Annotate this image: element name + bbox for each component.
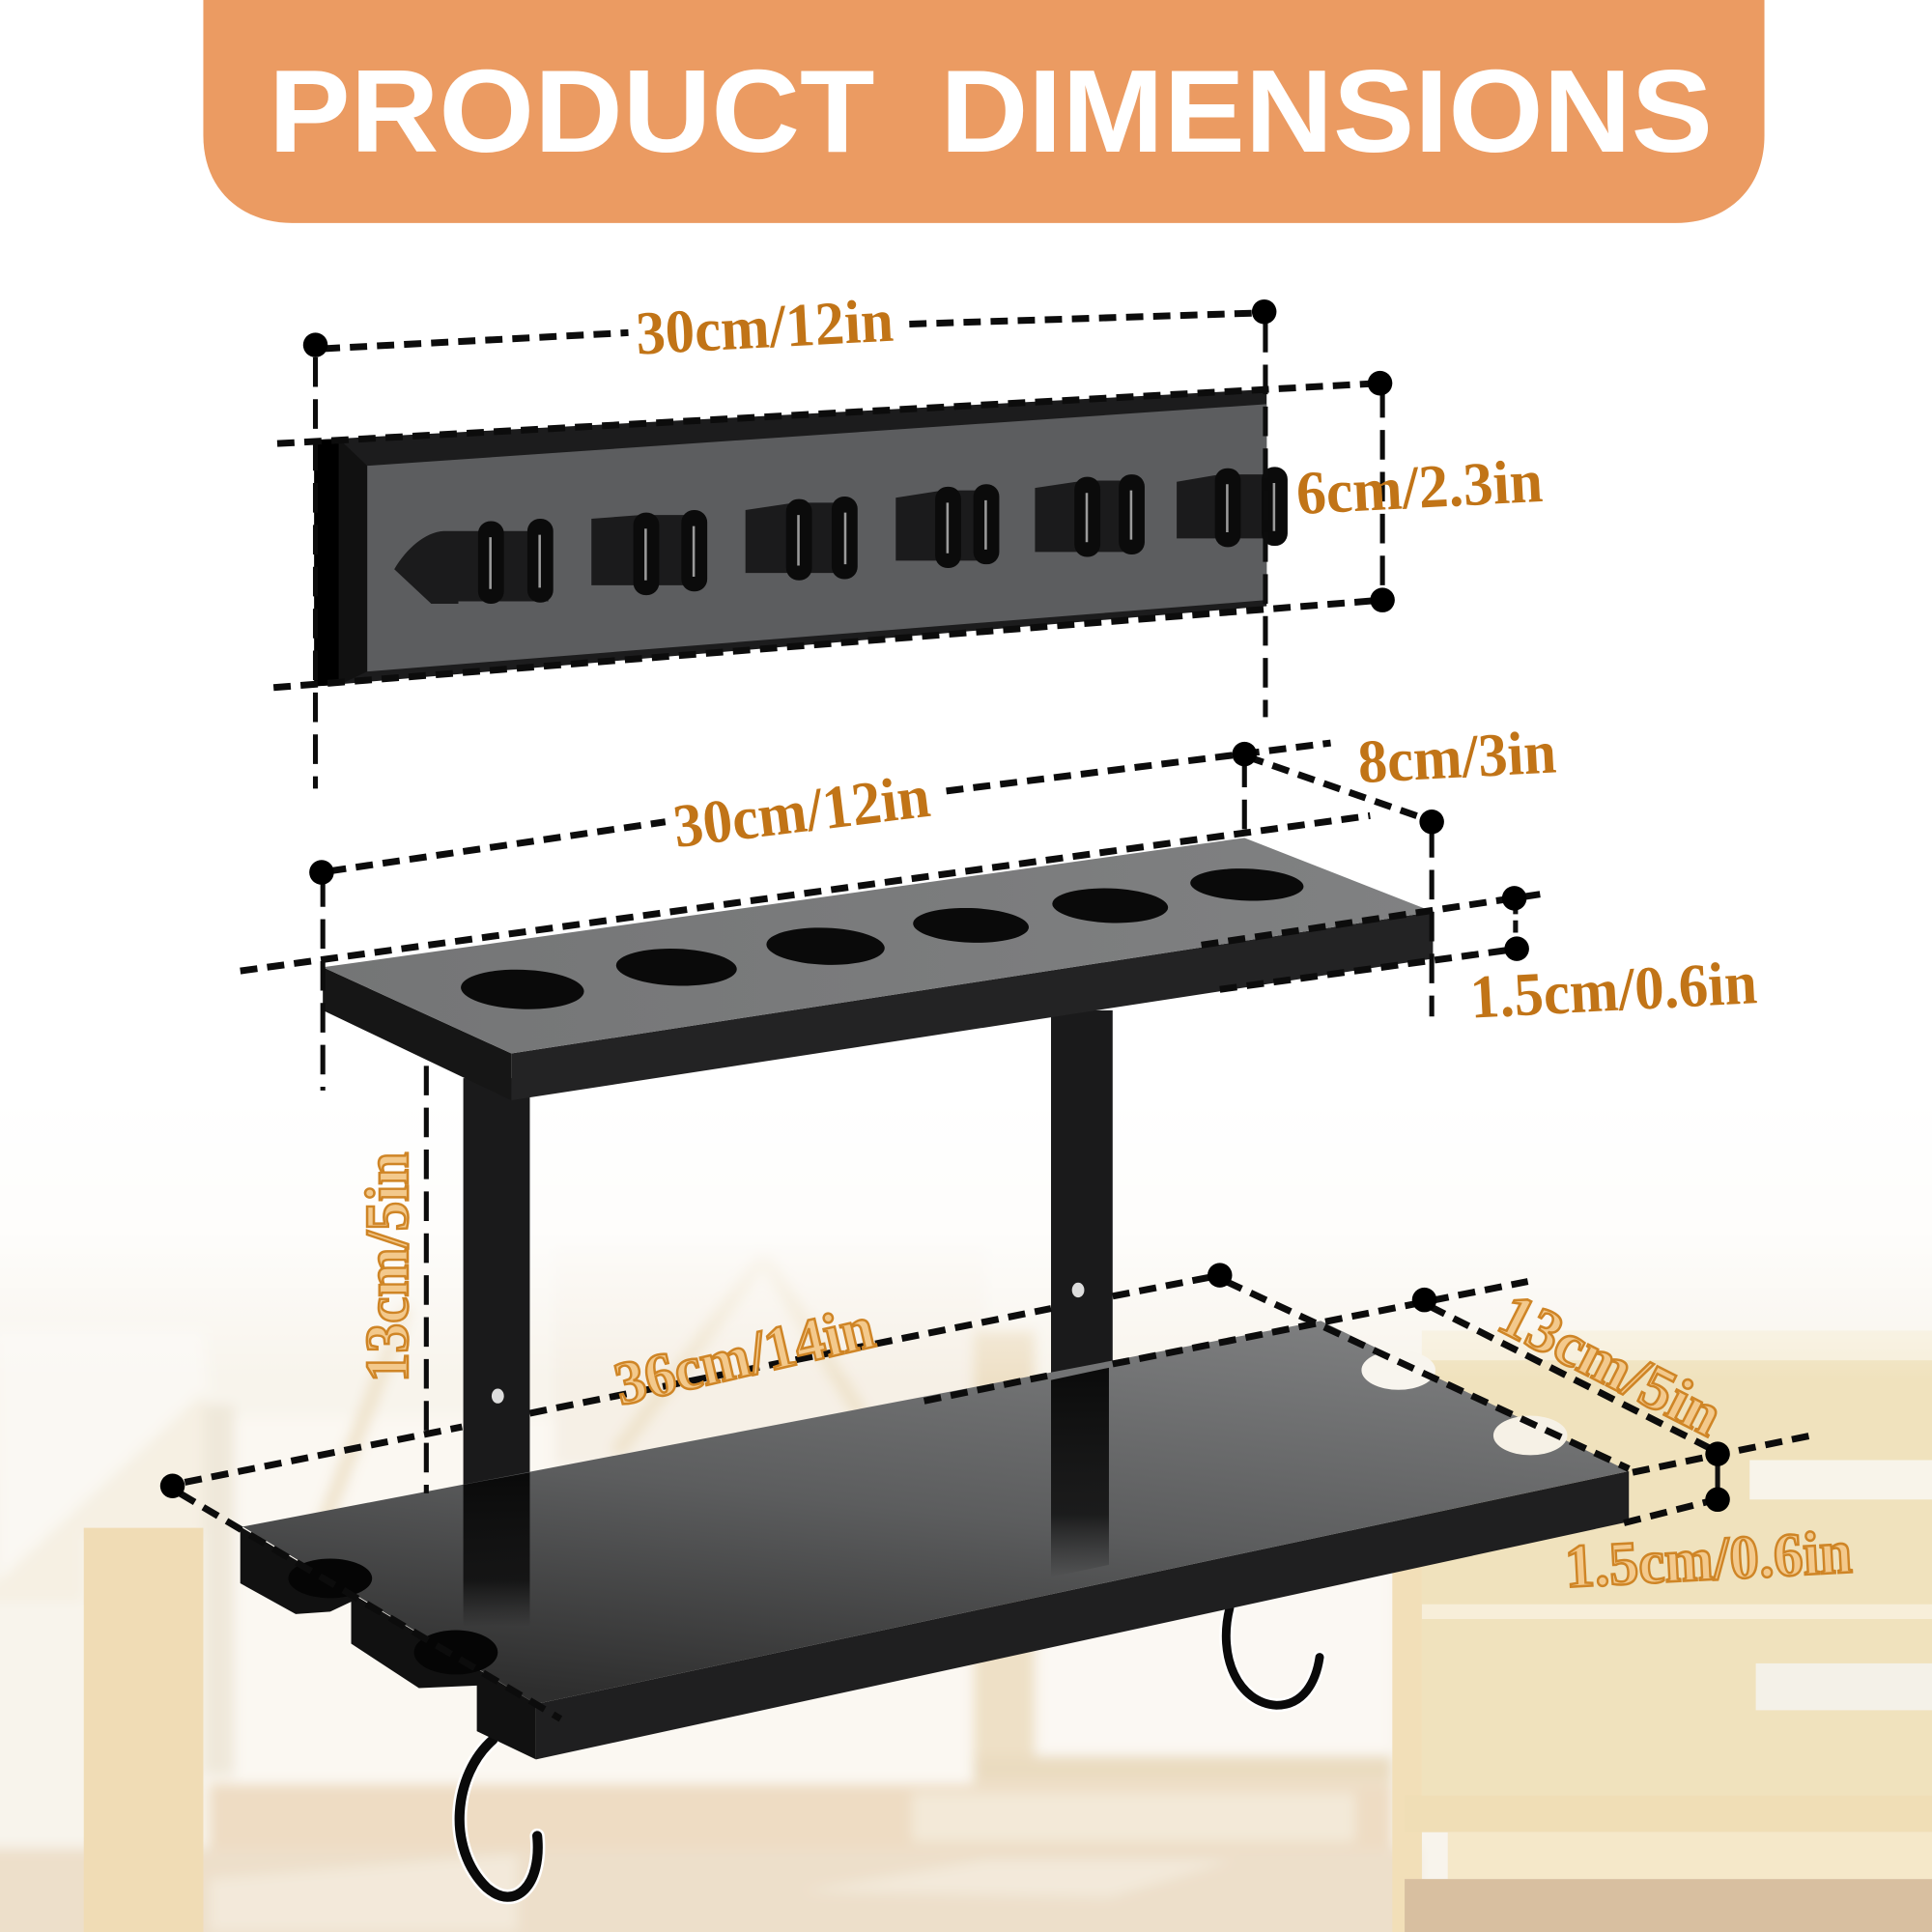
icon: left hook xyxy=(460,1740,538,1897)
title text: DIMENSIONS xyxy=(940,45,1713,177)
label: rail height: 6cm/2.3in xyxy=(1294,446,1545,527)
peg shadows xyxy=(394,474,1275,604)
label: shelf width: 30cm/12in xyxy=(669,761,933,861)
dimension lines: back rail xyxy=(273,299,1395,788)
panel: back rail with pegs xyxy=(314,389,1288,686)
panel: lower support legs xyxy=(464,1010,1113,1503)
pegs xyxy=(478,467,1288,604)
label: rail width: 30cm/12in xyxy=(634,286,895,368)
label: bottom shelf depth: 13cm/5in xyxy=(1489,1279,1734,1450)
dimension lines: top shelf xyxy=(241,742,1547,1091)
title text: PRODUCT xyxy=(269,45,875,177)
label: bottom shelf width: 36cm/14in xyxy=(608,1293,880,1418)
dimension lines: bottom shelf xyxy=(160,1065,1811,1719)
panel: top shelf with holes xyxy=(323,838,1433,1100)
title banner xyxy=(203,0,1765,223)
shelf notches xyxy=(1361,1350,1435,1390)
holes xyxy=(460,867,1304,1011)
icon: right hook xyxy=(1226,1608,1320,1705)
leg reflections xyxy=(464,1472,529,1627)
panel: bottom shelf xyxy=(241,1321,1629,1759)
label: leg height: 13cm/5in xyxy=(353,1152,421,1382)
label: bottom shelf thickness: 1.5cm/0.6in xyxy=(1563,1517,1854,1601)
label: shelf thickness: 1.5cm/0.6in xyxy=(1468,948,1759,1032)
label: shelf depth: 8cm/3in xyxy=(1356,717,1558,796)
